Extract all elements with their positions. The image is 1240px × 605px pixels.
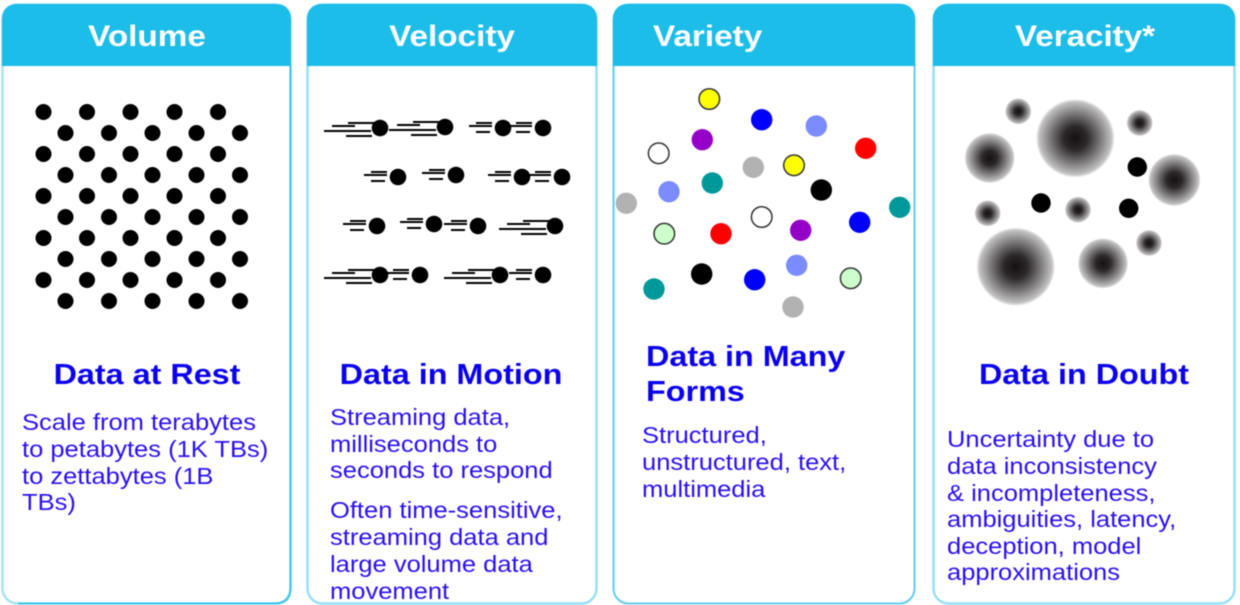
heading: Data in Motion: Data in Motion bbox=[340, 358, 562, 391]
header: Volume: Volume bbox=[88, 19, 206, 53]
coloured dots: many forms bbox=[616, 89, 910, 318]
blurred dots: data in doubt bbox=[965, 98, 1200, 306]
panel frame: Velocity bbox=[308, 4, 596, 604]
panel: Volume bbox=[2, 4, 291, 604]
header: Veracity bbox=[933, 4, 1235, 66]
dot grid: data at rest bbox=[36, 104, 248, 309]
panel frame: Variety bbox=[614, 4, 914, 604]
panel: Veracity bbox=[933, 4, 1235, 604]
panel: Velocity bbox=[307, 4, 597, 605]
header: Variety: Variety bbox=[653, 19, 763, 53]
text: Veracity description: Uncertainty due to bbox=[947, 427, 1154, 453]
heading: Data in Many Forms: Forms bbox=[646, 375, 745, 408]
text: Veracity description: & incompleteness, bbox=[947, 481, 1155, 507]
text: Velocity description: seconds to respond bbox=[330, 458, 553, 484]
panel frame: Veracity bbox=[934, 4, 1234, 604]
text: Velocity description: milliseconds to bbox=[330, 432, 497, 458]
text: Variety description: Structured, bbox=[642, 423, 767, 449]
header: Veracity: Veracity* bbox=[1015, 18, 1156, 53]
text: Volume description: Scale from terabytes bbox=[22, 410, 256, 436]
text: Volume description: to zettabytes (1B bbox=[22, 464, 213, 490]
text: Velocity description: streaming data and bbox=[330, 525, 548, 551]
text: Veracity description: approximations bbox=[947, 560, 1120, 586]
header: Velocity bbox=[307, 4, 597, 66]
text: Volume description: to petabytes (1K TBs) bbox=[22, 437, 268, 463]
panel frame: Volume bbox=[2, 4, 290, 604]
text: Volume description: TBs) bbox=[22, 490, 76, 516]
text: Velocity description: Often time-sensitive, bbox=[330, 498, 563, 524]
header: Variety bbox=[613, 4, 915, 66]
text: Veracity description: ambiguities, latency, bbox=[947, 507, 1176, 533]
header: Volume bbox=[2, 4, 291, 66]
text: Variety description: unstructured, text, bbox=[642, 450, 846, 476]
text: Velocity description: movement bbox=[330, 579, 449, 605]
heading: Data in Many Forms: Data in Many bbox=[646, 340, 845, 373]
heading: Data at Rest: Data at Rest bbox=[54, 358, 240, 391]
text: Velocity description: Streaming data, bbox=[330, 405, 510, 431]
text: Velocity description: large volume data bbox=[330, 552, 533, 578]
heading: Data in Doubt: Data in Doubt bbox=[979, 358, 1189, 391]
panel: Variety bbox=[613, 4, 915, 604]
text: Variety description: multimedia bbox=[642, 477, 766, 503]
moving dots: data in motion bbox=[324, 119, 570, 283]
header: Velocity: Velocity bbox=[389, 19, 515, 53]
text: Veracity description: data inconsistency bbox=[947, 454, 1158, 480]
text: Veracity description: deception, model bbox=[947, 534, 1141, 560]
